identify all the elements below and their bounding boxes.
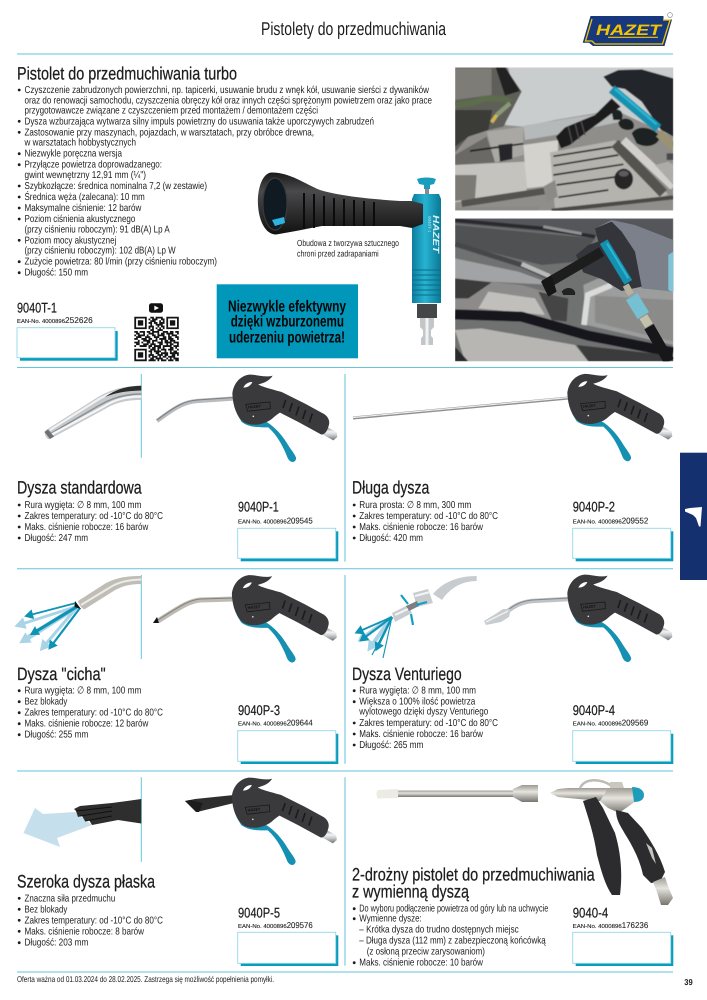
EAN: 9040T-1: EAN-No. 4000896 xyxy=(17,318,65,325)
EAN: 9040P-5 xyxy=(238,920,313,930)
header title: Pistolety do przedmuchiwania xyxy=(261,18,447,39)
price box: 9040P-3 xyxy=(238,731,338,764)
feature list: 9040P-4: wylotowego dzięki dyszy Venturiego xyxy=(358,707,489,718)
price box: 9040P-4 xyxy=(573,731,673,764)
feature list: 9040P-2: Długość: 420 mm xyxy=(359,533,423,544)
image caption: chroni przed zadrapaniami xyxy=(297,249,379,259)
price box: 9040-4 xyxy=(573,932,673,966)
product image: 9040P-4 xyxy=(484,575,672,662)
panel: standard nozzle xyxy=(17,375,338,561)
feature list: 9040P-3: Rura wygięta: ∅ 8 mm, 100 mm xyxy=(24,686,141,697)
EAN: 9040P-1 xyxy=(238,515,313,525)
feature list: turbo: gwint wewnętrzny 12,91 mm (¼") xyxy=(24,170,146,181)
HAZET logo xyxy=(583,13,672,46)
feature list: turbo: (przy ciśnieniu roboczym): 102 dB(A) Lp W xyxy=(24,246,176,257)
product number: 9040P-1: 9040P-1 xyxy=(238,499,279,515)
EAN: 9040T-1 xyxy=(17,315,93,325)
feature list: 9040P-3 xyxy=(18,686,163,741)
EAN: 9040P-4: 209569 xyxy=(622,718,649,728)
price box: 9040P-2 xyxy=(573,528,673,561)
category tab xyxy=(680,453,707,580)
EAN: 9040P-4 xyxy=(573,718,649,728)
product image: turbo gun xyxy=(258,172,441,345)
feature list: turbo: Maksymalne ciśnienie: 12 barów xyxy=(24,203,142,214)
EAN: 9040P-5: EAN-No. 4000896 xyxy=(238,923,287,930)
heading: standard nozzle: Dysza standardowa xyxy=(17,477,142,497)
panel: long nozzle xyxy=(352,374,673,561)
feature list: turbo: Zastosowanie przy maszynach, pojazdach, w warsztatach, przy obróbce drewna, xyxy=(24,127,314,138)
panel: Venturi nozzle xyxy=(352,575,673,764)
product number: 9040T-1: 9040T-1 xyxy=(17,299,57,315)
icon: blow gun xyxy=(685,507,702,526)
product image: 9040P-2: HAZET xyxy=(583,404,597,409)
feature list: turbo: Zużycie powietrza: 80 l/min (przy ciśnieniu roboczym) xyxy=(24,257,217,268)
heading: flat nozzle: Szeroka dysza płaska xyxy=(17,872,156,892)
panel: two-way gun xyxy=(352,780,673,969)
feature list: 9040P-4 xyxy=(353,686,498,751)
heading: turbo: Pistolet do przedmuchiwania turbo xyxy=(17,63,237,83)
feature list: 9040P-1: Maks. ciśnienie robocze: 16 barów xyxy=(24,522,149,533)
EAN: 9040-4 xyxy=(573,920,649,930)
product number: 9040P-4: 9040P-4 xyxy=(573,702,615,718)
panel: turbo blow gun xyxy=(17,63,673,361)
feature list: 9040P-4: Rura wygięta: ∅ 8 mm, 100 mm xyxy=(359,686,476,697)
heading: silent nozzle: Dysza "cicha" xyxy=(17,664,106,684)
panel: wide flat nozzle xyxy=(17,778,338,966)
EAN: 9040-4: EAN-No. 4000896 xyxy=(573,923,622,930)
product image: 9040P-1: HAZET xyxy=(248,404,262,409)
feature list: 9040P-5 xyxy=(18,893,163,949)
feature list: turbo: (przy ciśnieniu roboczym): 91 dB(A) Lp A xyxy=(24,224,170,235)
feature list: turbo: Poziom mocy akustycznej xyxy=(24,235,116,246)
feature list: 9040-4: (z osłoną przeciw zarysowaniom) xyxy=(367,946,485,957)
detail image: Venturi nozzle xyxy=(360,576,477,658)
product image: turbo gun: 9040T-1 xyxy=(427,216,432,233)
image caption: Obudowa z tworzywa sztucznego xyxy=(297,238,399,248)
feature list: 9040P-1 xyxy=(18,500,163,544)
feature list: 9040-4: – Długa dysza (112 mm) z zabezpieczoną końcówką xyxy=(359,936,546,947)
feature list: 9040P-5: Maks. ciśnienie robocze: 8 barów xyxy=(24,926,145,937)
feature list: 9040-4: Do wyboru podłączenie powietrza od góry lub na uchwycie xyxy=(359,904,549,915)
EAN: 9040P-2: 209552 xyxy=(622,515,649,525)
EAN: 9040P-2 xyxy=(573,515,649,525)
product image: 9040P-1 xyxy=(157,375,337,462)
feature list: turbo: Szybkozłącze: średnica nominalna 7,2 (w zestawie) xyxy=(24,181,207,192)
feature list: 9040P-4: Długość: 265 mm xyxy=(359,740,423,751)
footer note: Oferta ważna od 01.03.2024 do 28.02.2025. Zastrzega się możliwość popełnienia pomyłki. xyxy=(17,974,274,984)
product image: 9040P-5: HAZET xyxy=(248,807,261,812)
page number: 39 xyxy=(684,977,693,987)
product number: 9040P-3: 9040P-3 xyxy=(238,702,280,718)
feature list: 9040-4: Maks. ciśnienie robocze: 10 barów xyxy=(359,958,484,969)
product number: 9040P-2: 9040P-2 xyxy=(573,499,615,515)
heading: Venturi nozzle: Dysza Venturiego xyxy=(352,664,462,684)
feature list: 9040P-3: Bez blokady xyxy=(24,697,67,708)
price box: 9040T-1 xyxy=(17,328,118,361)
feature list: 9040P-3: Długość: 255 mm xyxy=(24,730,88,741)
product number: 9040P-5: 9040P-5 xyxy=(238,904,280,920)
feature list: 9040P-3: Maks. ciśnienie robocze: 12 barów xyxy=(24,719,149,730)
callout: highlight: dzięki wzburzonemu xyxy=(231,314,344,331)
feature list: turbo: Długość: 150 mm xyxy=(24,268,88,279)
product image: exchangeable nozzle xyxy=(376,785,538,802)
heading: two-way gun: 2-drożny pistolet do przedmuchiwania xyxy=(352,864,595,884)
EAN: 9040P-3 xyxy=(238,718,313,728)
detail image: standard nozzle xyxy=(44,386,141,439)
feature list: 9040P-4: Większa o 100% ilość powietrza xyxy=(359,697,476,708)
image caption xyxy=(297,238,399,259)
feature list: 9040P-2: Rura prosta: ∅ 8 mm, 300 mm xyxy=(359,500,471,511)
callout: highlight xyxy=(217,284,358,358)
feature list: 9040P-5: Bez blokady xyxy=(24,904,67,915)
feature list: 9040-4: Wymienne dysze: xyxy=(359,914,422,925)
product number: 9040-4: 9040-4 xyxy=(573,904,608,920)
feature list: 9040P-1: Długość: 247 mm xyxy=(24,533,88,544)
feature list: turbo: Dysza wzburzająca wytwarza silny impuls powietrzny do usuwania także uporczywych zabrudzeń xyxy=(24,116,374,127)
feature list: 9040P-4: Maks. ciśnienie robocze: 16 barów xyxy=(359,729,484,740)
callout: highlight: uderzeniu powietrza! xyxy=(229,330,345,347)
feature list: 9040P-2 xyxy=(353,500,498,544)
feature list: 9040P-1: Rura wygięta: ∅ 8 mm, 100 mm xyxy=(24,500,141,511)
feature list: turbo: Czyszczenie zabrudzonych powierzchni, np. tapicerki, usuwanie brudu z wnęk kół, usuwanie sierści z dywaników xyxy=(24,85,430,96)
feature list: turbo: Poziom ciśnienia akustycznego xyxy=(24,214,136,225)
photo: car windshield cleaning xyxy=(455,218,673,361)
EAN: 9040P-3: 209644 xyxy=(287,718,313,728)
panel: silent nozzle xyxy=(17,575,338,764)
feature list: 9040P-5: Zakres temperatury: od -10°C do 80°C xyxy=(24,915,163,926)
HAZET logo: HAZET xyxy=(596,22,663,39)
icon: video xyxy=(149,303,163,313)
feature list: turbo: Przyłącze powietrza doprowadzanego: xyxy=(24,160,162,171)
feature list: turbo: Niezwykle poręczna wersja xyxy=(24,149,122,160)
feature list: 9040-4: – Krótka dysza do trudno dostępnych miejsc xyxy=(359,925,519,936)
feature list: 9040P-1: Zakres temperatury: od -10°C do 80°C xyxy=(24,511,163,522)
feature list: 9040P-2: Maks. ciśnienie robocze: 16 barów xyxy=(359,522,484,533)
feature list: turbo: Średnica węża (zalecana): 10 mm xyxy=(24,191,145,203)
product image: 9040P-5 xyxy=(185,778,337,865)
price box: 9040P-5 xyxy=(238,932,338,966)
product image: 9040-4 xyxy=(550,780,673,905)
heading: two-way gun xyxy=(352,864,595,902)
product image: 9040P-3 xyxy=(153,575,337,662)
feature list: turbo xyxy=(18,85,432,279)
product image: turbo gun: HAZET xyxy=(431,215,441,255)
EAN: 9040P-3: EAN-No. 4000896 xyxy=(238,721,287,728)
EAN: 9040P-2: EAN-No. 4000896 xyxy=(573,518,622,525)
feature list: turbo: przygotowawcze związane z czyszczeniem przed montażem / demontażem części xyxy=(24,105,318,116)
detail image: silent nozzle xyxy=(22,576,141,645)
price box: 9040P-1 xyxy=(238,528,338,561)
product image: 9040P-3: HAZET xyxy=(248,605,261,610)
photo: workshop bed cleaning xyxy=(455,67,673,211)
callout: highlight: Niezwykle efektywny xyxy=(228,299,346,316)
feature list: 9040P-5: Znaczna siła przedmuchu xyxy=(24,893,115,904)
heading: two-way gun: z wymienną dyszą xyxy=(352,882,470,902)
EAN: 9040P-1: 209545 xyxy=(287,515,313,525)
feature list: 9040P-4: Zakres temperatury: od -10°C do 80°C xyxy=(359,718,498,729)
detail image: flat nozzle xyxy=(24,799,141,847)
product image: 9040P-4: HAZET xyxy=(583,604,597,609)
feature list: turbo: oraz do renowacji samochodu, czyszczenia obręczy kół oraz innych części sprężonym powietrzem oraz jako prace xyxy=(24,95,432,106)
feature list: 9040-4 xyxy=(353,904,549,969)
EAN: 9040P-5: 209576 xyxy=(287,920,313,930)
feature list: 9040P-5: Długość: 203 mm xyxy=(24,938,88,949)
EAN: 9040-4: 176236 xyxy=(622,920,649,930)
feature list: 9040P-2: Zakres temperatury: od -10°C do 80°C xyxy=(359,511,498,522)
product image: 9040P-2 xyxy=(353,374,672,461)
feature list: 9040P-3: Zakres temperatury: od -10°C do 80°C xyxy=(24,708,163,719)
feature list: turbo: w warsztatach hobbystycznych xyxy=(24,137,136,148)
heading: long nozzle: Długa dysza xyxy=(352,477,430,497)
EAN: 9040T-1: 252626 xyxy=(65,315,93,325)
EAN: 9040P-4: EAN-No. 4000896 xyxy=(573,721,622,728)
EAN: 9040P-1: EAN-No. 4000896 xyxy=(238,518,287,525)
QR code xyxy=(134,317,179,361)
